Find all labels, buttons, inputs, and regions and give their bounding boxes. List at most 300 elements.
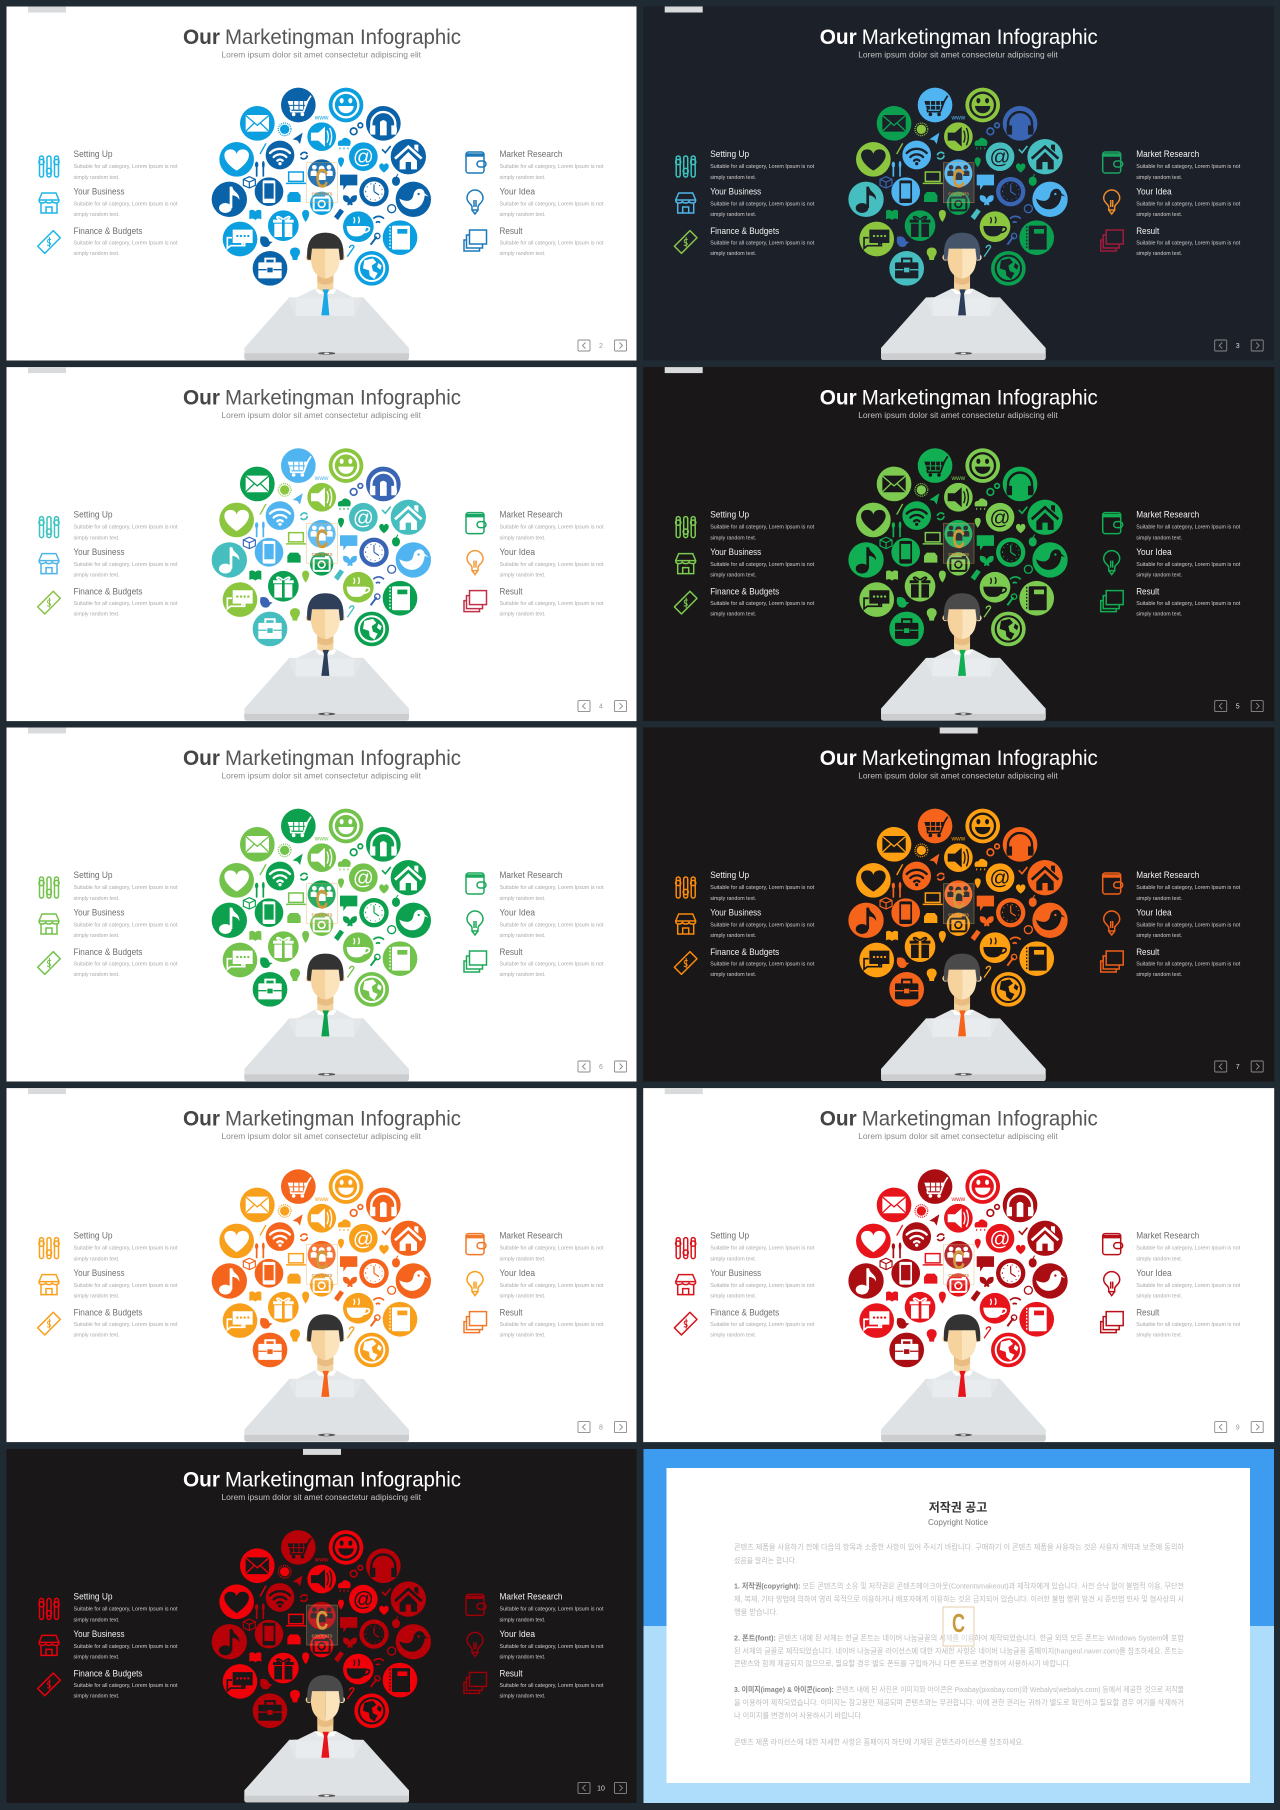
notice body text: 콘텐츠와 함께 제공되지 않으므로, 필요할 경우 별도 폰트를 구입하거나 다른 폰트로 변경하여 사용하시기 바랍니다. <box>734 1658 1071 1668</box>
text: Setting Up: simply random text. <box>74 896 120 902</box>
icon: sliders <box>39 517 59 538</box>
watermark <box>943 163 974 203</box>
text: Your Idea: simply random text. <box>500 212 546 218</box>
title: Marketingman Infographic <box>225 26 461 49</box>
text: Setting Up: Setting Up <box>74 510 112 520</box>
text: Your Business: Your Business <box>710 1268 762 1278</box>
icon: store <box>39 914 59 934</box>
icon: wallet <box>1103 152 1123 173</box>
text: Finance & Budgets <box>74 1308 178 1339</box>
subtitle: Lorem ipsum dolor sit amet consectetur adipiscing elit <box>858 772 1059 780</box>
text: Setting Up: Setting Up <box>74 1591 112 1601</box>
icon: bulb <box>1104 1272 1120 1296</box>
text: Market Research: Market Research <box>1136 510 1199 520</box>
text: Finance & Budgets <box>710 1308 815 1339</box>
title: Our <box>820 387 857 410</box>
notice body text: 행을 받습니다. <box>734 1606 778 1616</box>
text: Your Business <box>74 547 178 579</box>
slide background <box>643 1088 1274 1442</box>
title: Our <box>183 26 220 49</box>
text: Your Business: Your Business <box>74 547 125 557</box>
navigation: 7 <box>1236 1064 1240 1071</box>
icon: sliders <box>676 1238 696 1259</box>
icon: sliders <box>676 156 696 177</box>
text: Result: simply random text. <box>1136 1333 1183 1339</box>
icon: stack <box>1101 230 1123 251</box>
slide background <box>6 1088 636 1442</box>
title: Our <box>183 1108 220 1131</box>
text: Your Idea <box>500 1268 604 1300</box>
text: Setting Up: Suitable for all category, Lorem Ipsum is not <box>74 885 178 891</box>
text: Your Idea: simply random text. <box>1136 1294 1183 1300</box>
text: Finance & Budgets: Finance & Budgets <box>74 226 143 236</box>
text: Your Idea: Suitable for all category, Lorem Ipsum is not <box>1136 1283 1241 1289</box>
text: Your Business: Suitable for all category, Lorem Ipsum is not <box>74 1644 178 1650</box>
text: Market Research: Market Research <box>1136 870 1199 880</box>
title: Our <box>183 1468 220 1491</box>
icon: money <box>674 952 697 974</box>
text: Market Research: Suitable for all category, Lorem Ipsum is not <box>500 885 604 891</box>
text: Finance & Budgets <box>74 947 178 978</box>
icon: bulb <box>467 1272 483 1296</box>
text: Finance & Budgets: Suitable for all category, Lorem Ipsum is not <box>74 962 178 968</box>
text: Your Business: Suitable for all category, Lorem Ipsum is not <box>710 562 815 568</box>
title: Marketingman Infographic <box>225 747 461 770</box>
text: Your Business: simply random text. <box>710 1294 757 1300</box>
text: Result: simply random text. <box>500 612 546 618</box>
subtitle: Lorem ipsum dolor sit amet consectetur adipiscing elit <box>858 50 1059 60</box>
text: Setting Up: simply random text. <box>74 1617 120 1623</box>
icon: bulb <box>467 1632 483 1656</box>
text: Your Business: simply random text. <box>710 212 757 218</box>
text: Market Research <box>1136 1231 1241 1263</box>
navigation: 4 <box>599 704 603 711</box>
icon: wallet <box>1103 873 1123 894</box>
text: Result <box>1136 226 1241 257</box>
notice subheading: Copyright Notice <box>928 1518 989 1527</box>
presenter figure with tablet <box>881 233 1046 360</box>
text: Your Business: Suitable for all category, Lorem Ipsum is not <box>710 1283 815 1289</box>
text: Your Business: Suitable for all category, Lorem Ipsum is not <box>74 1283 178 1289</box>
text: Finance & Budgets: simply random text. <box>710 251 757 257</box>
text: Setting Up: Setting Up <box>74 149 112 159</box>
text: Setting Up <box>74 510 178 542</box>
text: Market Research <box>1136 510 1241 542</box>
text: Setting Up <box>710 1231 815 1263</box>
text: Market Research: Suitable for all category, Lorem Ipsum is not <box>1136 885 1241 891</box>
text: Your Idea: Your Idea <box>500 1629 535 1639</box>
text: Finance & Budgets: simply random text. <box>710 612 757 618</box>
text: Setting Up <box>710 510 815 542</box>
text: Finance & Budgets: Suitable for all category, Lorem Ipsum is not <box>710 962 815 968</box>
text: Finance & Budgets: Suitable for all category, Lorem Ipsum is not <box>710 601 815 607</box>
text: Market Research: Market Research <box>500 1591 562 1601</box>
text: Your Idea: simply random text. <box>500 1294 546 1300</box>
text: Setting Up <box>74 1591 178 1623</box>
text: Your Business: Suitable for all category, Lorem Ipsum is not <box>74 562 178 568</box>
text: Your Idea: simply random text. <box>500 933 546 939</box>
text: Setting Up <box>74 1231 178 1263</box>
text: Result: simply random text. <box>500 1333 546 1339</box>
text: Result: simply random text. <box>1136 972 1183 978</box>
slide: page 8, orange on white <box>6 1088 636 1442</box>
text: Finance & Budgets: simply random text. <box>74 972 120 978</box>
icon: wallet <box>466 873 486 894</box>
icon cloud <box>212 448 431 646</box>
text: Setting Up: simply random text. <box>710 536 757 542</box>
text: Market Research <box>1136 149 1241 181</box>
notice body text: 셨음을 알리는 합니다. <box>734 1556 797 1565</box>
text: Setting Up: Setting Up <box>710 149 749 159</box>
icon cloud <box>212 809 431 1007</box>
icon: stack <box>464 591 486 612</box>
text: Result: Result <box>1136 1308 1160 1318</box>
icon cloud <box>848 1169 1068 1367</box>
navigation: 9 <box>1236 1425 1240 1432</box>
text: Market Research: Suitable for all category, Lorem Ipsum is not <box>500 164 604 170</box>
text: Result: Result <box>500 587 523 597</box>
presenter figure with tablet <box>881 954 1046 1081</box>
icon: money <box>38 591 60 614</box>
notice body text: 콘텐츠 제품 라이선스에 대한 자세한 사항은 홈페이지 하단에 기재된 콘텐츠라이선스를 참조하세요. <box>734 1736 1024 1746</box>
icon: store <box>676 1275 696 1295</box>
white notice panel <box>666 1468 1250 1783</box>
text: Finance & Budgets: simply random text. <box>74 251 120 257</box>
icon: money <box>38 1673 60 1696</box>
text: Your Idea: Your Idea <box>500 186 535 196</box>
icon: sliders <box>39 1238 59 1259</box>
text: Your Business: Your Business <box>710 186 762 196</box>
title: Our <box>820 1108 857 1131</box>
text: Finance & Budgets: simply random text. <box>74 612 120 618</box>
watermark <box>943 1607 974 1646</box>
text: Setting Up: Suitable for all category, Lorem Ipsum is not <box>74 1246 178 1252</box>
text: Result: Suitable for all category, Lorem Ipsum is not <box>500 240 604 246</box>
text: Your Business: Suitable for all category, Lorem Ipsum is not <box>710 202 815 208</box>
text: Finance & Budgets <box>74 587 178 618</box>
text: Setting Up: Setting Up <box>710 1231 749 1241</box>
icon: bulb <box>1104 551 1120 575</box>
text: Your Idea <box>1136 547 1241 579</box>
navigation: 10 <box>597 1785 605 1792</box>
text: Finance & Budgets: Finance & Budgets <box>74 587 143 597</box>
icon: bulb <box>1104 190 1120 214</box>
slide: page 6, greens on white <box>6 728 636 1082</box>
text: Result <box>1136 1308 1241 1339</box>
text: Setting Up: Suitable for all category, Lorem Ipsum is not <box>710 885 815 891</box>
icon cloud <box>848 809 1068 1007</box>
text: Finance & Budgets: Finance & Budgets <box>74 1308 143 1318</box>
text: Your Business <box>710 908 815 939</box>
text: Setting Up: Suitable for all category, Lorem Ipsum is not <box>74 164 178 170</box>
slide background <box>6 1449 636 1803</box>
watermark <box>307 163 337 203</box>
text: Your Business <box>74 908 178 939</box>
slide background <box>6 6 636 360</box>
text: Result <box>1136 947 1241 978</box>
text: Setting Up: simply random text. <box>710 1257 757 1263</box>
light blue background bottom <box>644 1626 1274 1803</box>
watermark: C <box>952 1608 965 1638</box>
navigation <box>1215 340 1263 351</box>
title: Our <box>820 26 857 49</box>
text: Result: Suitable for all category, Lorem Ipsum is not <box>500 601 604 607</box>
navigation: 5 <box>1236 704 1240 711</box>
text: Setting Up: simply random text. <box>710 896 757 902</box>
slide: page 7, orange on black <box>643 728 1274 1082</box>
notice body text: 된 서체의 글꼴로 제작되었습니다. 네이버 나눔글꼴 라이선스에 대한 자세한 사항은 네이버 나눔글꼴 홈페이지(hangeul.naver.com)를 참조하세요. 폰트는 <box>734 1646 1184 1656</box>
title: Our <box>183 747 220 770</box>
title: Marketingman Infographic <box>862 26 1098 49</box>
text: Your Idea <box>1136 908 1241 939</box>
text: Your Idea: Suitable for all category, Lorem Ipsum is not <box>500 562 604 568</box>
icon: sliders <box>676 517 696 538</box>
icon: store <box>676 193 696 213</box>
slide: page 2, blue on white <box>6 6 636 360</box>
text: Result <box>1136 587 1241 618</box>
text: Your Business: simply random text. <box>74 212 120 218</box>
slide background <box>6 367 636 721</box>
subtitle: Lorem ipsum dolor sit amet consectetur adipiscing elit <box>858 411 1059 420</box>
navigation <box>1215 1061 1263 1072</box>
icon: stack <box>464 230 486 251</box>
text: Your Idea: simply random text. <box>1136 212 1183 218</box>
text: Market Research: simply random text. <box>500 896 546 902</box>
text: Your Idea: Your Idea <box>1136 186 1172 196</box>
navigation: 8 <box>599 1425 603 1432</box>
text: Result <box>500 947 604 978</box>
text: Finance & Budgets: simply random text. <box>74 1693 120 1699</box>
text: Result <box>500 226 604 257</box>
text: Market Research <box>500 149 604 181</box>
text: Result: Suitable for all category, Lorem Ipsum is not <box>1136 240 1241 246</box>
text: Finance & Budgets: simply random text. <box>710 972 757 978</box>
title: Marketingman Infographic <box>862 747 1098 770</box>
navigation <box>578 1061 626 1072</box>
title: Our <box>820 747 857 770</box>
text: Your Business: Suitable for all category, Lorem Ipsum is not <box>74 922 178 928</box>
text: Finance & Budgets: simply random text. <box>74 1333 120 1339</box>
subtitle: Lorem ipsum dolor sit amet consectetur adipiscing elit <box>222 1132 422 1141</box>
text: Finance & Budgets: simply random text. <box>710 1333 757 1339</box>
text: Market Research: Market Research <box>500 510 562 520</box>
text: Your Business: Your Business <box>74 1629 125 1639</box>
title: Our <box>183 387 220 410</box>
text: Your Business: Your Business <box>74 186 125 196</box>
text: Finance & Budgets: Finance & Budgets <box>710 587 780 597</box>
text: Setting Up: simply random text. <box>74 1257 120 1263</box>
text: Your Idea: Your Idea <box>1136 1268 1172 1278</box>
text: Your Idea <box>500 908 604 939</box>
text: Your Idea <box>1136 186 1241 218</box>
text: Result <box>500 1308 604 1339</box>
text: Finance & Budgets: Suitable for all category, Lorem Ipsum is not <box>74 240 178 246</box>
text: Market Research: simply random text. <box>500 175 546 181</box>
text: Your Idea: Suitable for all category, Lorem Ipsum is not <box>1136 562 1241 568</box>
icon: sliders <box>676 877 696 898</box>
icon: stack <box>1101 1312 1123 1333</box>
top tab <box>665 1088 703 1094</box>
subtitle: Lorem ipsum dolor sit amet consectetur adipiscing elit <box>222 772 422 780</box>
text: Result: Suitable for all category, Lorem Ipsum is not <box>500 1322 604 1328</box>
text: Market Research: Suitable for all category, Lorem Ipsum is not <box>500 1606 604 1612</box>
notice body text: 나 이미지를 변경하여 사용하시기 바랍니다. <box>734 1710 863 1720</box>
icon: store <box>39 1635 59 1655</box>
text: Market Research: simply random text. <box>500 536 546 542</box>
icon: bulb <box>467 911 483 935</box>
presenter figure with tablet <box>244 1675 409 1802</box>
presenter figure with tablet <box>244 593 409 721</box>
icon: store <box>676 554 696 574</box>
text: Setting Up: Suitable for all category, Lorem Ipsum is not <box>710 164 815 170</box>
slide: page 9, red on white <box>643 1088 1274 1442</box>
notice body text: 콘텐츠 제품을 사용하기 전에 다음의 항목과 소중한 사항이 있어 주시기 바랍니다. 구매하기 이 콘텐츠 제품을 사용하는 것은 사용자 계약과 보증에 동의하 <box>734 1542 1184 1552</box>
text: Market Research: Suitable for all category, Lorem Ipsum is not <box>500 525 604 531</box>
top tab <box>28 367 66 373</box>
text: Market Research: Market Research <box>500 870 562 880</box>
icon: stack <box>1101 951 1123 972</box>
text: Setting Up: Suitable for all category, Lorem Ipsum is not <box>74 525 178 531</box>
presenter figure with tablet <box>244 1314 409 1442</box>
navigation: 6 <box>599 1064 603 1071</box>
navigation: 3 <box>1236 343 1240 350</box>
text: Setting Up: Setting Up <box>710 510 749 520</box>
notice body text <box>734 1542 1184 1746</box>
watermark <box>943 1244 974 1284</box>
text: Your Business: Your Business <box>710 547 762 557</box>
text: Your Business <box>74 1629 178 1660</box>
notice body text: 을 이용하여 제작되었습니다. 이미지는 참고용만 제공되며 콘텐츠와는 무관합니다. 이에 관한 권리는 귀하가 별도로 확인하고 필요할 경우 여기를 삭제하거 <box>734 1697 1184 1707</box>
top tab <box>28 1088 66 1094</box>
text: Finance & Budgets: Suitable for all category, Lorem Ipsum is not <box>74 601 178 607</box>
text: Finance & Budgets: Finance & Budgets <box>710 1308 780 1318</box>
text: Setting Up: Suitable for all category, Lorem Ipsum is not <box>710 525 815 531</box>
title: Marketingman Infographic <box>862 1108 1098 1131</box>
text: Your Idea: Suitable for all category, Lorem Ipsum is not <box>1136 202 1241 208</box>
text: Result <box>500 1668 604 1699</box>
title: Marketingman Infographic <box>225 1108 461 1131</box>
text: Result <box>500 587 604 618</box>
subtitle: Lorem ipsum dolor sit amet consectetur adipiscing elit <box>222 411 422 420</box>
notice body text: 2. 폰트(font): 콘텐츠 내에 된 서체는 한글 폰트는 네이버 나눔글꼴의 서체를 이용하여 제작되었습니다. 한글 외의 모든 폰트는 Windows System에 포함 <box>734 1632 1184 1642</box>
watermark <box>943 523 974 563</box>
text: Your Business: simply random text. <box>710 573 757 579</box>
text: Finance & Budgets: Finance & Budgets <box>74 1668 143 1678</box>
text: Result: Suitable for all category, Lorem Ipsum is not <box>1136 601 1241 607</box>
icon: store <box>39 193 59 213</box>
text: Your Business: Your Business <box>710 908 762 918</box>
icon: store <box>39 1275 59 1295</box>
icon: bulb <box>1104 911 1120 935</box>
icon: money <box>674 591 697 614</box>
icon: stack <box>464 1672 486 1693</box>
icon: bulb <box>467 551 483 575</box>
icon cloud <box>212 88 431 286</box>
text: Your Idea: Your Idea <box>500 1268 535 1278</box>
text: Setting Up: Suitable for all category, Lorem Ipsum is not <box>74 1606 178 1612</box>
subtitle: Lorem ipsum dolor sit amet consectetur adipiscing elit <box>222 50 422 60</box>
icon: wallet <box>466 1594 486 1615</box>
text: Market Research <box>500 1591 604 1623</box>
text: Result: Suitable for all category, Lorem Ipsum is not <box>500 1683 604 1689</box>
navigation <box>1215 701 1263 712</box>
text: Your Business: Suitable for all category, Lorem Ipsum is not <box>710 922 815 928</box>
title: Marketingman Infographic <box>225 387 461 410</box>
blue background top <box>644 1449 1274 1626</box>
text: Result: Result <box>1136 226 1160 236</box>
text: Market Research: simply random text. <box>1136 1257 1183 1263</box>
text: Your Business: simply random text. <box>74 933 120 939</box>
text: Setting Up: Setting Up <box>74 870 112 880</box>
text: Your Idea: simply random text. <box>500 1654 546 1660</box>
text: Market Research: Market Research <box>1136 149 1199 159</box>
presenter figure with tablet <box>244 233 409 360</box>
text: Result: Result <box>1136 587 1160 597</box>
slide: page 5, greens on black <box>643 367 1274 721</box>
text: Your Business <box>710 1268 815 1300</box>
text: Result: simply random text. <box>500 251 546 257</box>
icon cloud <box>212 1169 431 1367</box>
text: Your Idea: Suitable for all category, Lorem Ipsum is not <box>1136 922 1241 928</box>
text: Your Idea: Suitable for all category, Lorem Ipsum is not <box>500 1644 604 1650</box>
subtitle: Lorem ipsum dolor sit amet consectetur adipiscing elit <box>222 1493 422 1502</box>
slide: page 3, multicolour on navy <box>643 6 1274 360</box>
top tab <box>665 367 703 373</box>
icon: wallet <box>466 1234 486 1255</box>
text: Finance & Budgets <box>74 226 178 257</box>
text: Your Idea <box>500 186 604 218</box>
text: Your Idea: Your Idea <box>500 547 535 557</box>
text: Market Research: simply random text. <box>500 1617 546 1623</box>
slide: copyright notice <box>644 1449 1274 1803</box>
navigation <box>578 1782 626 1793</box>
icon: stack <box>1101 591 1123 612</box>
text: Result: Suitable for all category, Lorem Ipsum is not <box>1136 962 1241 968</box>
icon: wallet <box>1103 1234 1123 1255</box>
text: Market Research <box>500 510 604 542</box>
text: Setting Up <box>710 149 815 181</box>
icon: money <box>674 1312 697 1335</box>
text: Market Research: Suitable for all category, Lorem Ipsum is not <box>1136 525 1241 531</box>
text: Finance & Budgets: Suitable for all category, Lorem Ipsum is not <box>74 1322 178 1328</box>
text: Your Idea: Your Idea <box>500 908 535 918</box>
text: Your Business: Your Business <box>74 1268 125 1278</box>
text: Result: Result <box>500 226 523 236</box>
text: Your Idea <box>500 547 604 579</box>
icon: stack <box>464 1312 486 1333</box>
icon: wallet <box>1103 513 1123 534</box>
text: Your Idea: simply random text. <box>1136 573 1183 579</box>
text: Market Research: simply random text. <box>1136 175 1183 181</box>
icon: wallet <box>466 513 486 534</box>
presenter figure with tablet <box>244 954 409 1081</box>
watermark <box>307 523 337 563</box>
text: Finance & Budgets <box>710 587 815 618</box>
text: Your Idea: Suitable for all category, Lorem Ipsum is not <box>500 1283 604 1289</box>
text: Your Business <box>74 186 178 218</box>
text: Your Idea <box>500 1629 604 1660</box>
slide background <box>643 367 1274 721</box>
text: Market Research: Suitable for all category, Lorem Ipsum is not <box>500 1246 604 1252</box>
watermark <box>307 884 337 924</box>
text: Your Idea: Your Idea <box>1136 908 1172 918</box>
text: Market Research: Market Research <box>500 149 562 159</box>
text: Market Research: Market Research <box>1136 1231 1199 1241</box>
text: Setting Up: Suitable for all category, Lorem Ipsum is not <box>710 1246 815 1252</box>
watermark <box>943 884 974 924</box>
text: Finance & Budgets <box>710 226 815 257</box>
text: Setting Up: simply random text. <box>74 536 120 542</box>
